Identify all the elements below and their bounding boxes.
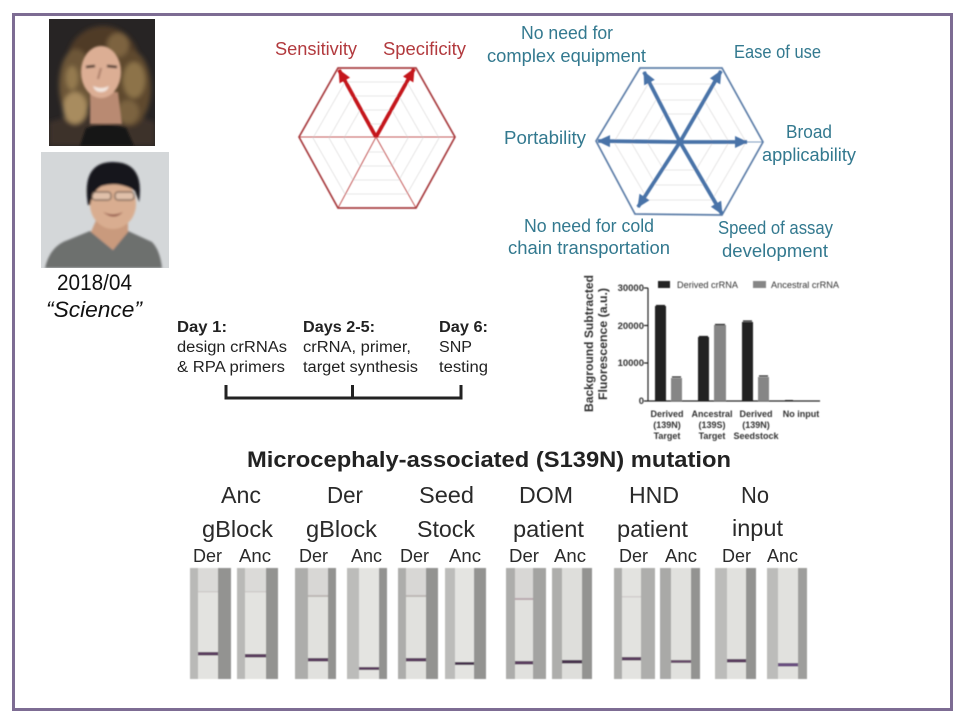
strip column labels: Anc: [554, 546, 586, 566]
legend: Ancestral crRNA: [771, 280, 839, 290]
y axis ticks and labels: [618, 283, 644, 407]
sample group labels: Stock: [417, 516, 475, 542]
radar labels: blue practical attributes: complex equipment: [487, 46, 646, 66]
timeline: assay development days: Day 1:: [177, 319, 227, 336]
x axis category labels: Derived: [650, 409, 684, 419]
strip: HND patient Der: [614, 568, 655, 679]
strip: Der gBlock Anc: [347, 568, 387, 679]
sample group labels: Anc: [221, 482, 261, 508]
x axis category labels: (139N): [653, 420, 681, 430]
strip: Der gBlock Der: [295, 568, 336, 679]
y axis title: Fluorescence (a.u.): [598, 288, 610, 400]
date and journal caption: “Science”: [46, 297, 144, 322]
error bars: [656, 306, 768, 377]
legend: Derived crRNA: [677, 280, 738, 290]
sample group labels: Der: [327, 482, 363, 508]
y axis ticks and labels: 20000: [618, 321, 644, 332]
strip column labels: [193, 546, 798, 566]
strip column labels: Der: [722, 546, 751, 566]
x axis category labels: Target: [654, 431, 680, 441]
strip: No input Der: [715, 568, 756, 679]
strip: Anc gBlock Der: [190, 568, 231, 679]
timeline: assay development days: target synthesis: [303, 359, 418, 376]
x axis category labels: Target: [699, 431, 725, 441]
y axis ticks and labels: 0: [639, 396, 644, 407]
sample group labels: input: [732, 515, 784, 541]
timeline: assay development days: Day 6:: [439, 319, 488, 336]
radar labels: blue practical attributes: Broad: [786, 122, 832, 142]
strip: Seed Stock Der: [398, 568, 438, 679]
strip: DOM patient Anc: [552, 568, 592, 679]
strip column labels: Anc: [351, 546, 382, 566]
y axis title: [584, 275, 610, 412]
radar labels: sensitivity and specificity: [275, 39, 466, 59]
bars: [655, 306, 793, 401]
sample group labels: Seed: [419, 482, 474, 508]
timeline: assay development days: testing: [439, 359, 488, 376]
timeline: assay development days: crRNA, primer,: [303, 339, 411, 356]
strip column labels: Anc: [239, 546, 271, 566]
timeline: assay development days: [177, 319, 488, 376]
photo: woman scientist portrait: [49, 19, 155, 146]
x axis category labels: (139N): [742, 420, 770, 430]
strip column labels: Anc: [665, 546, 697, 566]
timeline: assay development days: Days 2-5:: [303, 319, 375, 336]
radar labels: blue practical attributes: development: [722, 241, 828, 261]
y axis ticks and labels: 10000: [618, 358, 644, 369]
strip: Seed Stock Anc: [445, 568, 486, 679]
lateral flow section title: Microcephaly-associated (S139N) mutation: [247, 447, 731, 472]
strip column labels: Der: [509, 546, 539, 566]
radar labels: blue practical attributes: No need for cold: [524, 216, 654, 236]
strip: No input Anc: [767, 568, 807, 679]
x axis category labels: No input: [783, 409, 819, 419]
strip: HND patient Anc: [660, 568, 700, 679]
sample group labels: patient: [617, 516, 689, 542]
sample group labels: No: [741, 482, 769, 508]
strip column labels: Der: [400, 546, 429, 566]
sample group labels: gBlock: [202, 516, 274, 542]
photo: man scientist portrait: [41, 152, 169, 268]
lateral flow test strips: [190, 568, 807, 679]
sample group labels: [202, 482, 784, 542]
radar labels: sensitivity and specificity: Sensitivity: [275, 39, 357, 59]
x axis category labels: (139S): [698, 420, 726, 430]
radar labels: sensitivity and specificity: Specificity: [383, 39, 466, 59]
strip column labels: Anc: [449, 546, 481, 566]
radar labels: blue practical attributes: Portability: [504, 128, 586, 148]
radar chart: red sensitivity and specificity: [299, 68, 455, 208]
strip: DOM patient Der: [506, 568, 546, 679]
sample group labels: DOM: [519, 482, 573, 508]
timeline: assay development days: & RPA primers: [177, 359, 285, 376]
sample group labels: patient: [513, 516, 585, 542]
radar labels: blue practical attributes: chain transportation: [508, 238, 670, 258]
x axis category labels: [650, 409, 819, 441]
x axis category labels: Derived: [739, 409, 773, 419]
sample group labels: HND: [629, 482, 679, 508]
timeline: assay development days: SNP: [439, 339, 472, 356]
timeline: assay development days: design crRNAs: [177, 339, 287, 356]
date and journal caption: [46, 270, 144, 322]
x axis category labels: Ancestral: [691, 409, 733, 419]
strip column labels: Der: [619, 546, 648, 566]
y axis ticks and labels: 30000: [618, 283, 644, 294]
radar labels: blue practical attributes: Speed of assay: [718, 218, 833, 238]
sample group labels: gBlock: [306, 516, 378, 542]
radar labels: blue practical attributes: Ease of use: [734, 42, 821, 62]
radar chart: blue practical attributes: [596, 68, 763, 215]
strip column labels: Der: [299, 546, 328, 566]
radar labels: blue practical attributes: No need for: [521, 23, 613, 43]
strip column labels: Anc: [767, 546, 798, 566]
legend: [658, 280, 839, 290]
strip: Anc gBlock Anc: [237, 568, 278, 679]
bar chart: background subtracted fluorescence: [584, 275, 839, 441]
strip column labels: Der: [193, 546, 222, 566]
radar labels: blue practical attributes: applicability: [762, 145, 856, 165]
timeline bracket: [226, 385, 461, 398]
y axis title: Background Subtracted: [584, 275, 596, 412]
x axis category labels: Seedstock: [733, 431, 780, 441]
radar labels: blue practical attributes: [487, 23, 856, 261]
date and journal caption: 2018/04: [57, 270, 132, 295]
